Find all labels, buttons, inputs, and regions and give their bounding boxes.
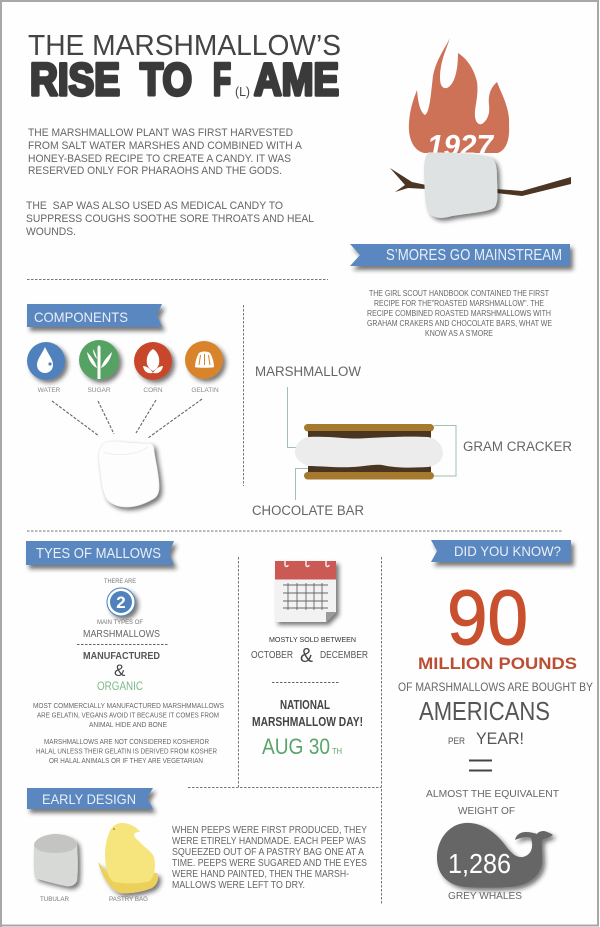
component labels (38, 387, 219, 394)
icon: whale with count: 1,286 (448, 848, 511, 879)
banner: types of mallows: TYES OF MALLOWS (36, 545, 161, 562)
chocolate (308, 431, 431, 443)
early design text: WERE ETIRELY HANDMADE. EACH PEEP WAS (172, 836, 366, 847)
intro text: THE SAP WAS ALSO USED AS MEDICAL CANDY TO (26, 200, 283, 212)
early design labels (40, 896, 148, 903)
banner: components: COMPONENTS (34, 309, 128, 325)
title: TO (140, 54, 192, 105)
statistic: 90 million pounds: 90 (447, 573, 528, 661)
equivalent weight text (426, 788, 560, 817)
types of mallows text: HALAL UNLESS THEIR GELATIN IS DERIVED FROM KOSHER (36, 746, 217, 756)
component labels: GELATIN (191, 387, 219, 394)
types of mallows text: MARSHMALLOWS ARE NOT CONSIDERED KOSHEROR (44, 737, 209, 746)
title: THE MARSHMALLOW’S (28, 30, 341, 62)
statistic: 90 million pounds: AMERICANS (419, 696, 550, 726)
intro text: HONEY-BASED RECIPE TO CREATE A CANDY. IT WAS (28, 153, 291, 165)
whale caption: GREY WHALES (448, 890, 522, 902)
statistic: 90 million pounds (398, 573, 593, 748)
banner: did you know: DID YOU KNOW? (454, 543, 561, 559)
statistic: 90 million pounds: MILLION POUNDS (418, 654, 577, 673)
banner: components (27, 304, 162, 327)
component labels: WATER (38, 387, 61, 394)
s'mores text (367, 289, 552, 338)
types of mallows summary: MARSHMALLOWS (83, 628, 160, 640)
intro text: SUPPRESS COUGHS SOOTHE SORE THROATS AND HEAL (26, 213, 314, 225)
types of mallows summary (77, 578, 168, 693)
s'more labels: GRAM CRACKER (463, 439, 572, 454)
season text: DECEMBER (320, 650, 368, 661)
s'mores text: RECIPE COMBINED ROASTED MARSHMALLOWS WITH (367, 309, 551, 318)
national marshmallow day: TH (332, 747, 342, 756)
icon: roasted marshmallow (424, 153, 498, 218)
intro text: FROM SALT WATER MARSHES AND COMBINED WITH A (28, 140, 303, 152)
types of mallows text: OR HALAL ANIMALS OR IF THEY ARE VEGETARIAN (49, 756, 203, 765)
types of mallows summary: MANUFACTURED (83, 651, 160, 662)
types of mallows summary: & (114, 661, 126, 680)
early design text: MALLOWS WERE LEFT TO DRY. (172, 880, 305, 891)
banner: early design: EARLY DESIGN (42, 791, 136, 807)
s'mores text: GRAHAM CRAKERS AND CHOCOLATE BARS, WHAT WE (367, 319, 552, 328)
equivalent weight text: ALMOST THE EQUIVALENT (426, 788, 560, 800)
early design text: WERE HAND PAINTED, THEN THE MARSH- (172, 869, 349, 880)
component labels: CORN (143, 387, 163, 394)
s'more diagram (288, 387, 456, 500)
early design text: SQUEEZED OUT OF A PASTRY BAG ONE AT A (172, 847, 364, 858)
season text: OCTOBER (251, 650, 293, 661)
banner: s'mores go mainstream: S’MORES GO MAINSTREAM (386, 247, 562, 264)
icon: tubular marshmallow (34, 834, 78, 886)
types of mallows summary: THERE ARE (104, 578, 137, 585)
illustration: flaming marshmallow on a stick, 1927 (390, 38, 571, 218)
icon: white marshmallow (99, 441, 159, 507)
title: F (213, 54, 231, 105)
s'more labels: CHOCOLATE BAR (252, 503, 364, 518)
title: (L) (235, 84, 250, 99)
national marshmallow day (252, 698, 363, 759)
types of mallows text: ANIMAL HIDE AND BONE (89, 720, 167, 729)
statistic: 90 million pounds: PER (448, 736, 465, 746)
graham crackers (304, 424, 434, 432)
banner: s'mores go mainstream (350, 244, 570, 266)
early design labels: TUBULAR (40, 896, 69, 903)
intro text: RESERVED ONLY FOR PHARAOHS AND THE GODS. (28, 165, 282, 177)
s'mores text: RECIPE FOR THE"ROASTED MARSHMALLOW". THE (374, 299, 544, 308)
early design text (172, 825, 367, 891)
icon: pastry bag peep (98, 823, 158, 893)
icon: stick (390, 168, 571, 196)
dashed section dividers (27, 280, 562, 905)
statistic: 90 million pounds: YEAR! (476, 729, 524, 748)
national marshmallow day: AUG 30 (262, 734, 330, 759)
intro text (26, 127, 314, 238)
icon: water (27, 342, 65, 380)
season text: MOSTLY SOLD BETWEEN (269, 635, 356, 644)
season text (251, 635, 368, 682)
season text: & (300, 645, 314, 667)
types of mallows text: MOST COMMERCIALLY MANUFACTURED MARSHMMALLOWS (33, 701, 224, 710)
early design labels: PASTRY BAG (109, 896, 148, 903)
icon: whale with count (437, 823, 553, 888)
banner: did you know (431, 540, 571, 562)
national marshmallow day: MARSHMALLOW DAY! (252, 715, 363, 729)
banner: early design (27, 788, 153, 809)
title: RISE (30, 54, 120, 105)
types of mallows text: ARE GELATIN, VEGANS AVOID IT BECAUSE IT COMES FROM (37, 710, 219, 720)
component labels: SUGAR (87, 387, 111, 394)
title (28, 30, 341, 105)
national marshmallow day: NATIONAL (280, 698, 330, 712)
icon: flame (409, 38, 509, 153)
icon: sugar cane (79, 340, 119, 380)
icon: corn (134, 342, 172, 380)
early design text: TIME. PEEPS WERE SUGARED AND THE EYES (172, 858, 367, 869)
dashed connector lines (52, 399, 202, 438)
title: AME (254, 54, 339, 105)
icon: calendar (275, 559, 336, 622)
s'more labels (252, 364, 572, 518)
intro text: THE MARSHMALLOW PLANT WAS FIRST HARVESTED (28, 127, 293, 139)
equals sign (469, 760, 492, 772)
intro text: WOUNDS. (26, 226, 76, 238)
s'mores text: THE GIRL SCOUT HANDBOOK CONTAINED THE FIRST (369, 289, 549, 298)
types of mallows summary: ORGANIC (97, 681, 143, 693)
equivalent weight text: WEIGHT OF (458, 805, 515, 817)
early design text: WHEN PEEPS WERE FIRST PRODUCED, THEY (172, 825, 367, 836)
icon: gelatin (185, 341, 223, 379)
year: 1927 (427, 128, 495, 163)
types of mallows text (33, 701, 224, 765)
types of mallows summary: MAIN TYPES OF (97, 619, 143, 626)
leader lines (288, 387, 456, 500)
s'more labels: MARSHMALLOW (255, 364, 361, 379)
banner: types of mallows (26, 541, 174, 565)
icon: number 2 badge: 2 (116, 593, 126, 612)
s'mores text: KNOW AS A S’MORE (425, 329, 493, 338)
marshmallow filling (295, 437, 443, 468)
